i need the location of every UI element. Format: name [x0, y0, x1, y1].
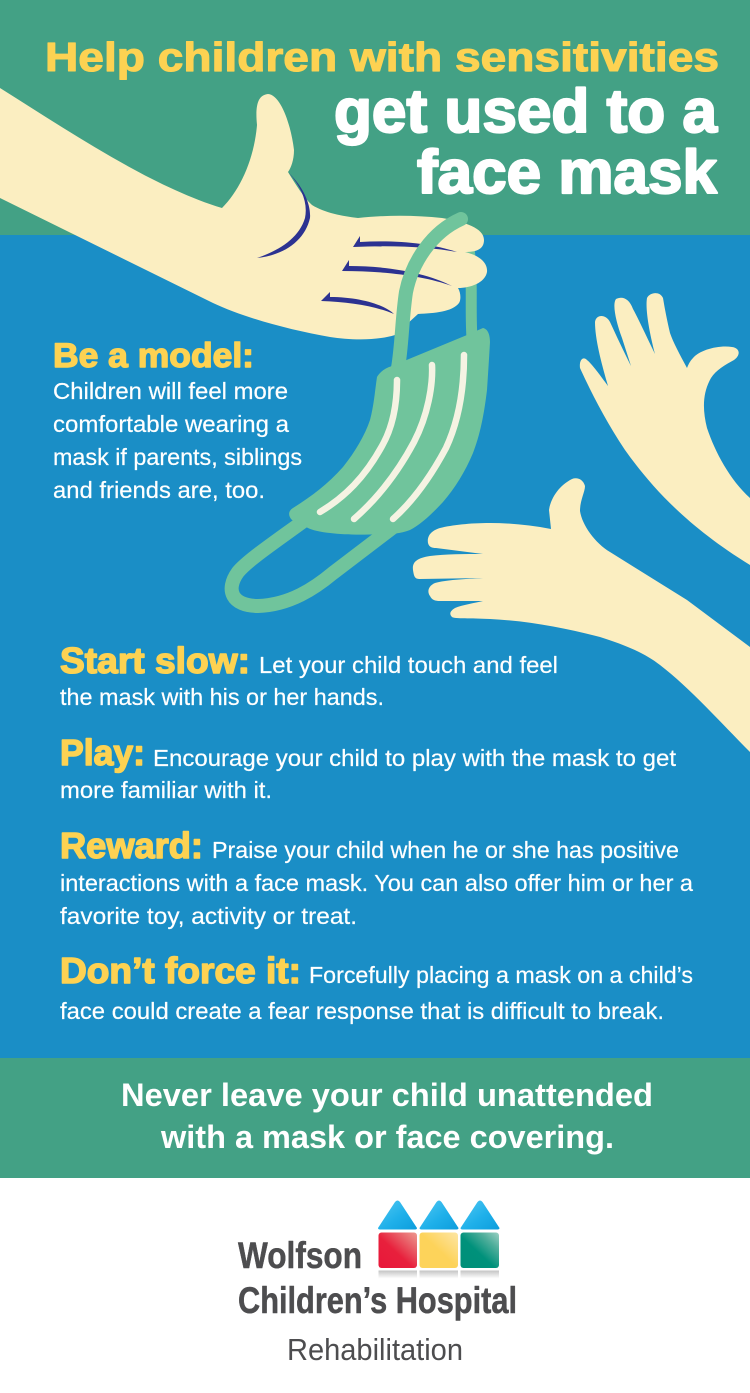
- icon: mask strap behind fingers: [469, 248, 472, 338]
- text block: reward: [60, 825, 693, 929]
- text block: do not force it: Forcefully placing a mask on a child’s: [309, 962, 693, 988]
- logo: Wolfson Children's Hospital Rehabilitation: [238, 1200, 517, 1367]
- text block: start slow: the mask with his or her hands.: [60, 684, 384, 710]
- icon: lower mask ear loop: [232, 515, 396, 606]
- text block: play: Encourage your child to play with the mask to get: [153, 745, 677, 771]
- icon: mask pleats: [320, 355, 464, 519]
- text block: reward: Praise your child when he or she has positive: [212, 837, 679, 863]
- title: Help children with sensitivities: [45, 34, 719, 80]
- callout: warning text: with a mask or face covering.: [160, 1119, 614, 1155]
- text block: play: more familiar with it.: [60, 777, 272, 803]
- panel: header band: [0, 0, 750, 235]
- text block: be a model: comfortable wearing a: [53, 411, 289, 437]
- logo wordmark: Wolfson: [238, 1235, 362, 1276]
- text block: reward: interactions with a face mask. You can also offer him or her a: [60, 870, 693, 896]
- text block: be a model: and friends are, too.: [53, 477, 265, 503]
- icon: hand holding mask: [0, 88, 487, 339]
- logo wordmark: [238, 1235, 517, 1367]
- text block: be a model: Children will feel more: [53, 378, 288, 404]
- text block: play: Play:: [60, 732, 145, 773]
- text block: do not force it: Don’t force it:: [60, 950, 301, 991]
- text block: reward: Reward:: [60, 825, 203, 866]
- title: [45, 34, 719, 206]
- text block: be a model: Be a model:: [53, 337, 254, 375]
- title: face mask: [417, 138, 717, 206]
- text block: do not force it: [60, 950, 693, 1024]
- icon: face mask: [289, 328, 490, 535]
- title: get used to a: [334, 77, 718, 145]
- text block: be a model: [53, 337, 302, 503]
- text block: do not force it: face could create a fear response that is difficult to break.: [60, 998, 664, 1024]
- callout: warning text: [121, 1077, 653, 1155]
- icon: mask ear loop front: [398, 219, 461, 368]
- text block: start slow: Let your child touch and feel: [259, 652, 558, 678]
- logo wordmark: Rehabilitation: [287, 1332, 463, 1367]
- icon: lower right hand: [413, 478, 750, 752]
- icon: blue roofs: [378, 1200, 500, 1230]
- icon: thumb crease: [257, 173, 310, 258]
- text block: reward: favorite toy, activity or treat.: [60, 903, 357, 929]
- callout: warning text: Never leave your child unattended: [121, 1077, 653, 1113]
- panel: warning band: [0, 1058, 750, 1178]
- icon: upper right hand: [580, 293, 750, 565]
- icon: coloured blocks: [378, 1232, 499, 1278]
- logo wordmark: Children’s Hospital: [238, 1280, 517, 1321]
- text block: be a model: mask if parents, siblings: [53, 444, 302, 470]
- icon: finger crease lines: [321, 236, 457, 314]
- text block: start slow: [60, 640, 558, 710]
- text block: start slow: Start slow:: [60, 640, 250, 681]
- text block: play: [60, 732, 677, 803]
